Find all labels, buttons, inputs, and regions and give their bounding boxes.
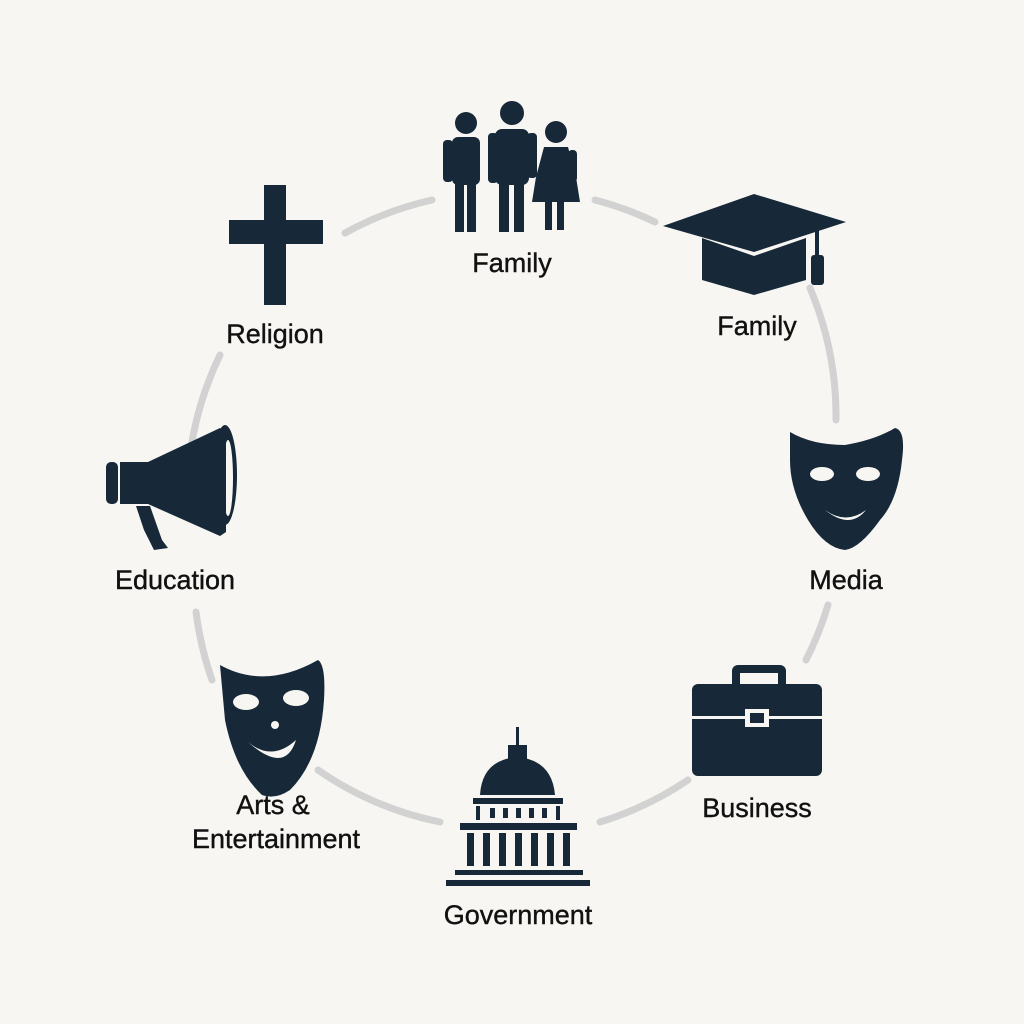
label: Arts & Entertainment: Arts & <box>236 790 310 820</box>
icon: mask left <box>220 660 324 797</box>
label: Government: Government <box>444 900 593 930</box>
icon: capitol <box>446 727 590 886</box>
icon: briefcase <box>692 665 822 776</box>
icon: cross <box>229 185 323 305</box>
label: Religion: Religion <box>226 319 324 349</box>
label: Business: Business <box>702 793 812 823</box>
label: Family top: Family <box>472 248 552 278</box>
label: Arts & Entertainment: Entertainment <box>192 824 361 854</box>
label: Education: Education <box>115 565 235 595</box>
ring <box>190 200 836 822</box>
label: Family right: Family <box>717 311 797 341</box>
icon: mask right <box>790 428 903 550</box>
label: Media: Media <box>809 565 884 595</box>
icon: graduation cap <box>663 194 846 295</box>
icon: megaphone <box>106 425 237 550</box>
icon: family people <box>443 101 580 232</box>
